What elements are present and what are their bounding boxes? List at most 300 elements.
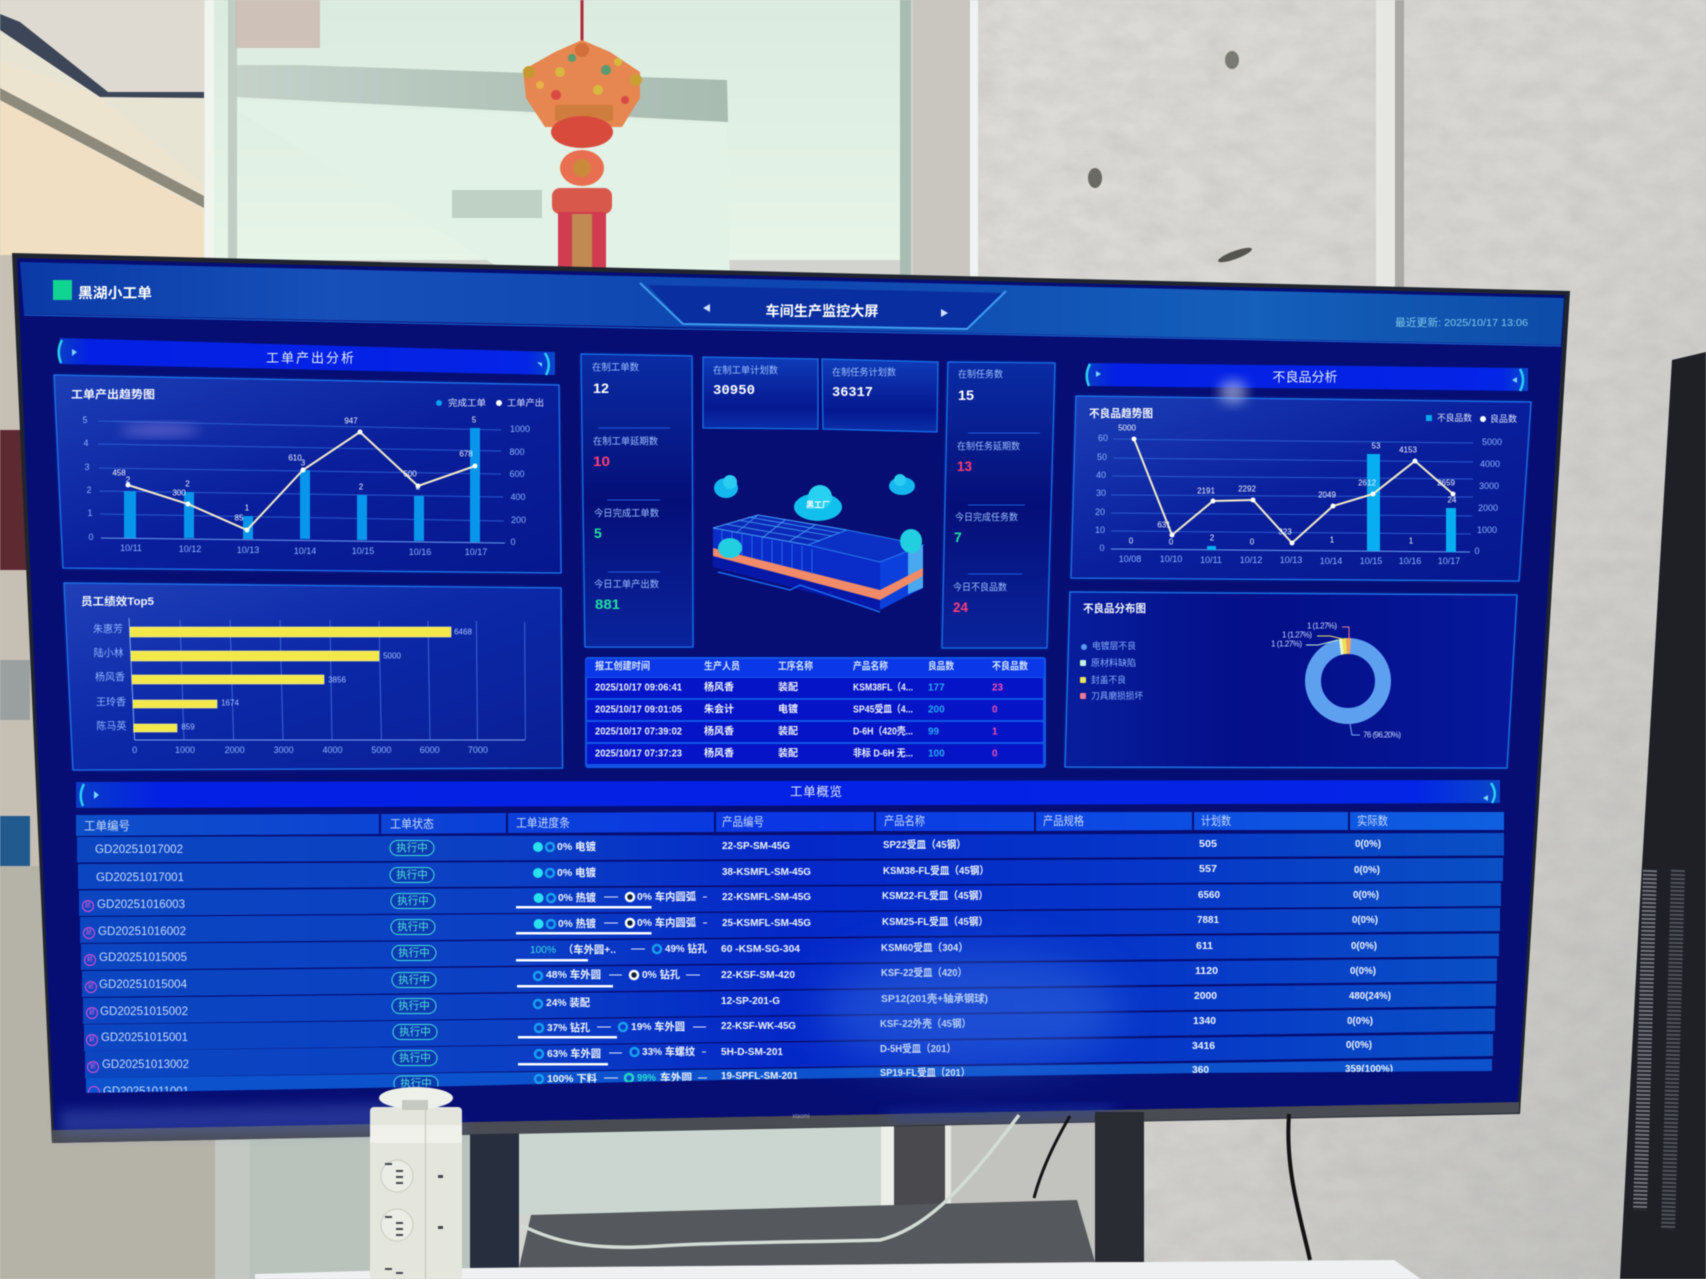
row GD20251015002: GD20251015002 (100, 1004, 188, 1018)
data labels: 0 (1169, 538, 1174, 546)
KPI: tasks completed today: 7 (954, 529, 962, 545)
right axis labels (509, 424, 530, 547)
data labels: 323 (1278, 528, 1292, 536)
x axis labels: 10/11 (120, 543, 142, 553)
x axis labels: 10/17 (465, 547, 487, 557)
row GD20251016003: 延 (85, 901, 91, 909)
panel: planned tasks KPI: 在制任务计划数 (832, 366, 896, 378)
left axis labels: 30 (1096, 488, 1106, 498)
chart title: 员工绩效Top5 (81, 594, 154, 608)
x axis labels: 10/14 (294, 546, 316, 556)
row GD20251013002: 0(0%) (1346, 1039, 1372, 1051)
data labels: 2 (416, 482, 421, 492)
table header (76, 812, 1504, 836)
row GD20251015005: 0(0%) (1351, 940, 1377, 952)
row GD20251015005: GD20251015005 (99, 950, 187, 964)
right axis labels: 2000 (1478, 503, 1498, 513)
data labels (112, 416, 477, 522)
x axis labels: 10/15 (1360, 556, 1382, 566)
data labels: 500 (403, 470, 417, 478)
section bar: defect analysis (1087, 363, 1528, 391)
KPI: tasks in progress (958, 368, 1003, 403)
row GD20251017001: KSM38-FL受皿（45钢） (883, 864, 989, 877)
row GD20251017001: 38-KSMFL-SM-45G (722, 866, 811, 878)
row GD20251011001 (cut off) (86, 1058, 1492, 1094)
row GD20251015005: 执行中 (398, 946, 430, 959)
bar values: 3856 (328, 676, 346, 684)
legend: 电镀层不良 (1092, 640, 1136, 651)
row GD20251015005: 49% 钻孔 (665, 942, 707, 955)
data labels: 610 (288, 454, 302, 462)
x axis labels: 7000 (468, 745, 488, 755)
monitor lower lip (52, 1102, 1519, 1143)
table header: 产品规格 (1043, 813, 1084, 828)
row GD20251011001 (cut off): 100% 下料 (547, 1072, 597, 1085)
panel: defect distribution donut (1065, 592, 1517, 768)
data labels: 2659 (1437, 478, 1455, 488)
panel: planned orders KPI (703, 357, 818, 429)
row GD20251016003: 执行中 (397, 894, 429, 907)
data labels: 24 (1448, 496, 1457, 504)
x axis labels: 4000 (322, 745, 343, 755)
chart title: 不良品分布图 (1083, 601, 1146, 615)
x axis labels: 10/12 (1240, 555, 1262, 565)
left axis labels: 1 (87, 508, 93, 518)
right axis labels: 3000 (1479, 481, 1499, 491)
right axis labels: 200 (511, 515, 526, 525)
x axis labels: 3000 (274, 745, 294, 755)
section bar: work order overview: 工单概览 (790, 784, 842, 799)
header band (20, 262, 1564, 346)
right axis labels: 0 (1474, 546, 1480, 556)
row GD20251015001: 0(0%) (1347, 1015, 1373, 1027)
row 1: 177 (928, 682, 945, 694)
legend: 不良品数 (1437, 412, 1472, 423)
left axis labels: 3 (84, 462, 90, 472)
KPI: defects today: 今日不良品数 (953, 582, 1007, 594)
row 3: 2025/10/17 07:39:02 (595, 726, 682, 738)
row 2: 2025/10/17 09:01:05 (595, 704, 682, 716)
left axis labels: 10 (1095, 525, 1105, 535)
row 4: 0 (992, 748, 998, 760)
row GD20251015005: 611 (1196, 940, 1213, 952)
data labels: 4153 (1399, 446, 1417, 454)
KPI: output today (594, 578, 659, 612)
KPI: delayed tasks (957, 440, 1020, 474)
donut labels: 76 (96.20%) (1363, 730, 1401, 740)
KPI: completed today (594, 508, 659, 541)
row GD20251015001: 19% 车外圆 (631, 1020, 685, 1033)
bar values: 1674 (221, 698, 239, 708)
employee names: 杨风香 (95, 670, 125, 684)
KPI: delayed tasks: 在制任务延期数 (957, 440, 1020, 452)
row 2: 0 (992, 704, 998, 716)
row 3: 1 (992, 726, 998, 738)
row GD20251017002: 0% 电镀 (557, 840, 596, 853)
left axis labels: 5 (82, 415, 88, 425)
x axis labels: 0 (132, 745, 137, 755)
right axis labels: 5000 (1482, 437, 1502, 447)
KPI: completed today: 今日完成工单数 (594, 508, 659, 520)
table header: 产品编号 (722, 814, 764, 829)
white table edge (255, 1260, 1421, 1279)
data labels: 631 (1157, 520, 1171, 530)
data labels: 947 (344, 416, 358, 426)
donut chart (1313, 638, 1383, 716)
row GD20251013002: 3416 (1192, 1040, 1215, 1052)
row GD20251015005: 延 (87, 955, 93, 963)
row 3 (587, 722, 1043, 742)
cloud: lower right (900, 529, 922, 553)
factory body (713, 515, 923, 612)
employee names: 王玲香 (96, 696, 126, 708)
row 1: 杨风香 (704, 680, 734, 694)
row GD20251015005 (81, 934, 1499, 970)
row GD20251016002: GD20251016002 (98, 924, 186, 938)
row GD20251015002: SP12(201壳+轴承钢球) (881, 992, 988, 1005)
panel: defect trend chart (1071, 396, 1531, 581)
white power strip tower (370, 1087, 462, 1279)
row GD20251017002: 0(0%) (1355, 838, 1381, 850)
x axis labels: 10/15 (352, 546, 374, 556)
data labels: 2 (126, 476, 131, 484)
donut labels: 1 (1.27%) (1307, 622, 1337, 630)
row GD20251015005: KSM60受皿（304） (881, 941, 968, 954)
x axis labels: 2000 (225, 745, 245, 755)
row GD20251017002: GD20251017002 (95, 842, 183, 856)
legend: 完成工单 (448, 397, 486, 408)
left axis labels: 0 (88, 532, 94, 542)
row 1: 装配 (778, 680, 798, 694)
row GD20251016002: 延 (86, 928, 92, 936)
right axis labels: 800 (509, 447, 525, 457)
row GD20251013002: 执行中 (399, 1051, 431, 1064)
row GD20251015001 (84, 1008, 1495, 1051)
legend (1426, 412, 1517, 424)
employee names: 朱惠芳 (93, 622, 123, 636)
table: production reports (585, 657, 1046, 768)
row GD20251016003: GD20251016003 (97, 897, 185, 911)
legend: 刀具磨损损坏 (1091, 690, 1143, 701)
row GD20251011001 (cut off): 99% (637, 1072, 657, 1084)
row GD20251013002 (85, 1034, 1493, 1078)
KPI: tasks completed today: 今日完成任务数 (955, 512, 1018, 524)
panel: planned orders KPI: 30950 (713, 383, 755, 399)
bar values: 859 (181, 722, 195, 732)
row GD20251015004: KSF-22受皿（420） (881, 966, 967, 979)
x axis labels: 10/17 (1438, 556, 1460, 566)
data labels: 2 (359, 482, 364, 492)
row GD20251013002: D-5H受皿（201） (880, 1042, 956, 1055)
panel: work order output trend chart (54, 375, 561, 573)
data labels: 3 (301, 458, 306, 468)
monitor bezel (12, 253, 1570, 1143)
row GD20251016003: KSM22-FL受皿（45钢） (882, 889, 988, 902)
screen title: 车间生产监控大屏 (766, 303, 878, 319)
KPI: defects today (953, 582, 1007, 615)
panel: right KPI column (942, 362, 1055, 648)
left axis labels: 50 (1097, 452, 1107, 462)
row GD20251016002 (80, 908, 1500, 943)
right axis labels (1474, 437, 1502, 556)
row GD20251016003: 6560 (1198, 889, 1220, 901)
KPI: orders in progress: 12 (593, 380, 609, 396)
x axis labels: 10/13 (1280, 555, 1302, 565)
table header (586, 659, 1044, 677)
data labels: 300 (172, 488, 186, 498)
row GD20251017002: 执行中 (396, 841, 428, 854)
row GD20251013002: 5H-D-SM-201 (721, 1046, 783, 1058)
cloud: center factory (794, 485, 842, 521)
section bar: work order overview (76, 780, 1500, 808)
x axis labels: 1000 (175, 745, 195, 755)
cloud: center factory: 黑工厂 (806, 500, 830, 510)
row GD20251013002: 63% 车外圆 (547, 1047, 601, 1060)
bar values: 5000 (383, 652, 401, 660)
left axis labels: 2 (86, 485, 92, 495)
employee names: 陈马英 (96, 720, 126, 732)
row 3: 装配 (778, 724, 798, 738)
row GD20251016002: 0% 热镀 (558, 917, 596, 930)
data labels: 2612 (1358, 478, 1376, 488)
3D factory illustration (713, 474, 923, 612)
KPI: tasks in progress: 在制任务数 (958, 368, 1003, 380)
left axis labels: 40 (1096, 470, 1106, 480)
row GD20251016002: 7881 (1197, 914, 1219, 926)
row GD20251011001 (cut off): 359(100%) (1345, 1063, 1393, 1075)
KPI: orders in progress: 在制工单数 (592, 362, 639, 374)
right monitor stand (1095, 1112, 1144, 1262)
row 2: SP45受皿（4... (853, 702, 913, 716)
x axis labels: 10/14 (1320, 556, 1342, 566)
table header: 产品名称 (884, 813, 925, 828)
row GD20251015001: 1340 (1193, 1015, 1216, 1027)
left axis labels: 4 (83, 438, 89, 448)
data labels: 2 (1210, 534, 1215, 542)
row GD20251017002: 505 (1199, 838, 1217, 850)
panel: planned tasks KPI: 36317 (832, 385, 873, 401)
table header: 生产人员 (704, 660, 740, 672)
row GD20251016003: 22-KSMFL-SM-45G (722, 891, 811, 903)
row GD20251016002: KSM25-FL受皿（45钢） (882, 915, 988, 928)
legend: 良品数 (1490, 413, 1517, 424)
bars (1207, 454, 1456, 552)
row GD20251015002: 480(24%) (1349, 990, 1391, 1002)
row 4 (587, 744, 1043, 764)
row GD20251013002: 延 (90, 1062, 96, 1070)
line series (1132, 436, 1456, 546)
table header: 工序名称 (778, 660, 813, 672)
left axis labels (82, 415, 94, 542)
KPI: output today: 881 (595, 596, 620, 612)
monitor base (519, 1200, 1095, 1268)
row 3: D-6H（420壳... (853, 724, 913, 738)
black cable (1034, 1116, 1070, 1198)
panel: left KPI column (581, 354, 693, 647)
row 3: 99 (928, 726, 940, 738)
table header: 工单编号 (84, 818, 130, 833)
row GD20251017001: 执行中 (396, 868, 428, 881)
row GD20251015004: 0(0%) (1350, 965, 1376, 977)
x axis labels (132, 745, 488, 755)
row GD20251016003: 0% 热镀 (558, 891, 596, 904)
line series (126, 430, 478, 532)
row GD20251016002: 0(0%) (1352, 914, 1378, 926)
row 3: 杨风香 (704, 724, 734, 738)
section bar: work order output analysis (59, 338, 555, 375)
panel: planned tasks KPI (822, 359, 938, 432)
row GD20251015001: 22-KSF-WK-45G (721, 1020, 796, 1032)
donut labels: 1 (1.27%) (1271, 640, 1302, 648)
row GD20251015002: 执行中 (398, 999, 430, 1012)
section bar: defect analysis: 不良品分析 (1272, 370, 1338, 384)
row GD20251015002: 24% 装配 (546, 996, 590, 1009)
donut labels: 1 (1.27%) (1282, 630, 1312, 640)
row GD20251017002: 22-SP-SM-45G (722, 840, 790, 852)
row GD20251015005: 60 -KSM-SG-304 (721, 943, 800, 955)
KPI: output today: 今日工单产出数 (594, 578, 659, 590)
row 1: KSM38FL（4... (853, 682, 913, 694)
row GD20251011001 (cut off): 车外圆 (660, 1071, 692, 1084)
bar values (181, 628, 472, 732)
legend: 工单产出 (507, 397, 544, 408)
row 2: 电镀 (778, 702, 798, 716)
legend: 封盖不良 (1091, 674, 1126, 685)
row GD20251013002: 33% 车螺纹 (642, 1045, 695, 1058)
table: work order overview (76, 812, 1504, 1106)
right axis labels: 4000 (1480, 459, 1500, 469)
right axis labels: 1000 (1477, 525, 1497, 535)
row GD20251017001: GD20251017001 (96, 870, 184, 884)
row GD20251016002: 0% 车内圆弧 (637, 916, 696, 929)
data labels: 5000 (1118, 424, 1136, 432)
table header: 产品名称 (853, 660, 888, 672)
x axis labels: 10/10 (1160, 554, 1182, 564)
legend (1080, 640, 1143, 701)
row GD20251015002: 12-SP-201-G (721, 995, 780, 1007)
KPI: delayed orders (593, 436, 658, 469)
x axis labels (1119, 554, 1460, 566)
row GD20251015001: 37% 钻孔 (547, 1021, 590, 1034)
brand mark on bezel: xiaomi (792, 1114, 810, 1120)
x axis labels: 10/13 (237, 545, 259, 555)
table header: 工单进度条 (516, 815, 570, 830)
logo (53, 280, 152, 301)
donut labels (1271, 622, 1401, 740)
row 2 (587, 700, 1043, 720)
row GD20251011001 (cut off): 19-SPFL-SM-201 (721, 1070, 798, 1082)
x axis labels: 10/16 (1399, 556, 1421, 566)
monitor screen background (17, 258, 1565, 1130)
row 1: 2025/10/17 09:06:41 (595, 682, 682, 694)
row GD20251013002: GD20251013002 (102, 1057, 189, 1071)
row GD20251011001 (cut off): SP19-FL受皿（201） (880, 1066, 970, 1079)
row GD20251011001 (cut off): 执行中 (400, 1076, 432, 1090)
row GD20251015004: 0% 钻孔 (642, 968, 680, 981)
x axis labels: 10/08 (1119, 554, 1141, 564)
left axis labels: 0 (1099, 543, 1105, 553)
data labels: 1 (245, 504, 250, 512)
row GD20251016003: 0% 车内圆弧 (637, 890, 696, 903)
row 4: 装配 (778, 746, 798, 760)
row GD20251015005: 100% (530, 944, 556, 956)
x axis labels: 10/11 (1200, 555, 1222, 565)
row GD20251017001: 557 (1199, 863, 1217, 875)
row GD20251015005: （车外圆+.. (563, 943, 616, 956)
row 1 (587, 678, 1043, 698)
row GD20251016003 (79, 883, 1501, 916)
row GD20251015004: GD20251015004 (99, 977, 187, 991)
data labels: 2 (185, 480, 190, 488)
row GD20251015004 (82, 958, 1497, 997)
black cable right (1288, 1114, 1310, 1260)
employee names (93, 622, 126, 732)
row 4: 非标 D-6H 无... (853, 746, 913, 760)
data labels: 53 (1372, 442, 1381, 450)
panel: employee performance top 5 (64, 583, 562, 770)
row GD20251015002 (83, 984, 1496, 1024)
row 4: 2025/10/17 07:37:23 (595, 748, 682, 760)
left axis labels: 60 (1098, 433, 1108, 443)
right axis labels: 0 (510, 537, 516, 547)
KPI: tasks in progress: 15 (958, 387, 974, 403)
data labels: 0 (1129, 536, 1134, 546)
x axis labels: 10/16 (409, 547, 431, 557)
white cable (521, 1115, 1019, 1247)
KPI: completed today: 5 (594, 525, 602, 541)
data labels: 2049 (1318, 490, 1336, 500)
row GD20251017001: 0(0%) (1354, 864, 1380, 876)
x axis labels: 5000 (371, 745, 391, 755)
panel: planned orders KPI: 在制工单计划数 (713, 364, 778, 376)
data labels (1118, 424, 1457, 546)
data labels: 458 (112, 468, 126, 478)
row GD20251015001: 延 (89, 1035, 95, 1043)
row GD20251015004: 22-KSF-SM-420 (721, 969, 795, 981)
cloud: lower left (718, 538, 742, 558)
cloud: top right (889, 474, 915, 495)
KPI: delayed tasks: 13 (957, 458, 972, 474)
row 1: 23 (992, 682, 1004, 694)
KPI: delayed orders: 10 (593, 453, 610, 469)
row GD20251015004: 延 (88, 982, 94, 990)
row GD20251016002: 执行中 (397, 920, 429, 933)
data labels: 2292 (1238, 484, 1256, 494)
row GD20251017001: 0% 电镀 (557, 866, 596, 879)
table header: 工单状态 (390, 817, 434, 831)
row GD20251011001 (cut off): 360 (1192, 1064, 1209, 1076)
row GD20251017002 (77, 833, 1504, 862)
row GD20251015002: 2000 (1194, 990, 1217, 1002)
row 4: 100 (928, 748, 945, 760)
row GD20251011001 (cut off): GD20251011001 (103, 1084, 189, 1098)
x axis labels: 10/12 (179, 544, 201, 554)
data labels: 0 (1250, 538, 1255, 546)
data labels: 2191 (1197, 486, 1215, 496)
yellow bars (130, 627, 451, 732)
KPI: defects today: 24 (953, 599, 968, 615)
row GD20251015001: KSF-22外壳（45钢） (880, 1017, 971, 1030)
row GD20251017001 (78, 858, 1503, 889)
legend (436, 397, 544, 408)
logo: 黑湖小工单 (78, 285, 152, 301)
row 4: 杨风香 (704, 746, 734, 760)
data labels: 1 (1330, 536, 1335, 544)
row 2: 朱会计 (704, 702, 734, 716)
KPI: orders in progress (592, 362, 639, 396)
chart title: 工单产出趋势图 (71, 387, 155, 401)
table header: 实际数 (1357, 813, 1388, 828)
